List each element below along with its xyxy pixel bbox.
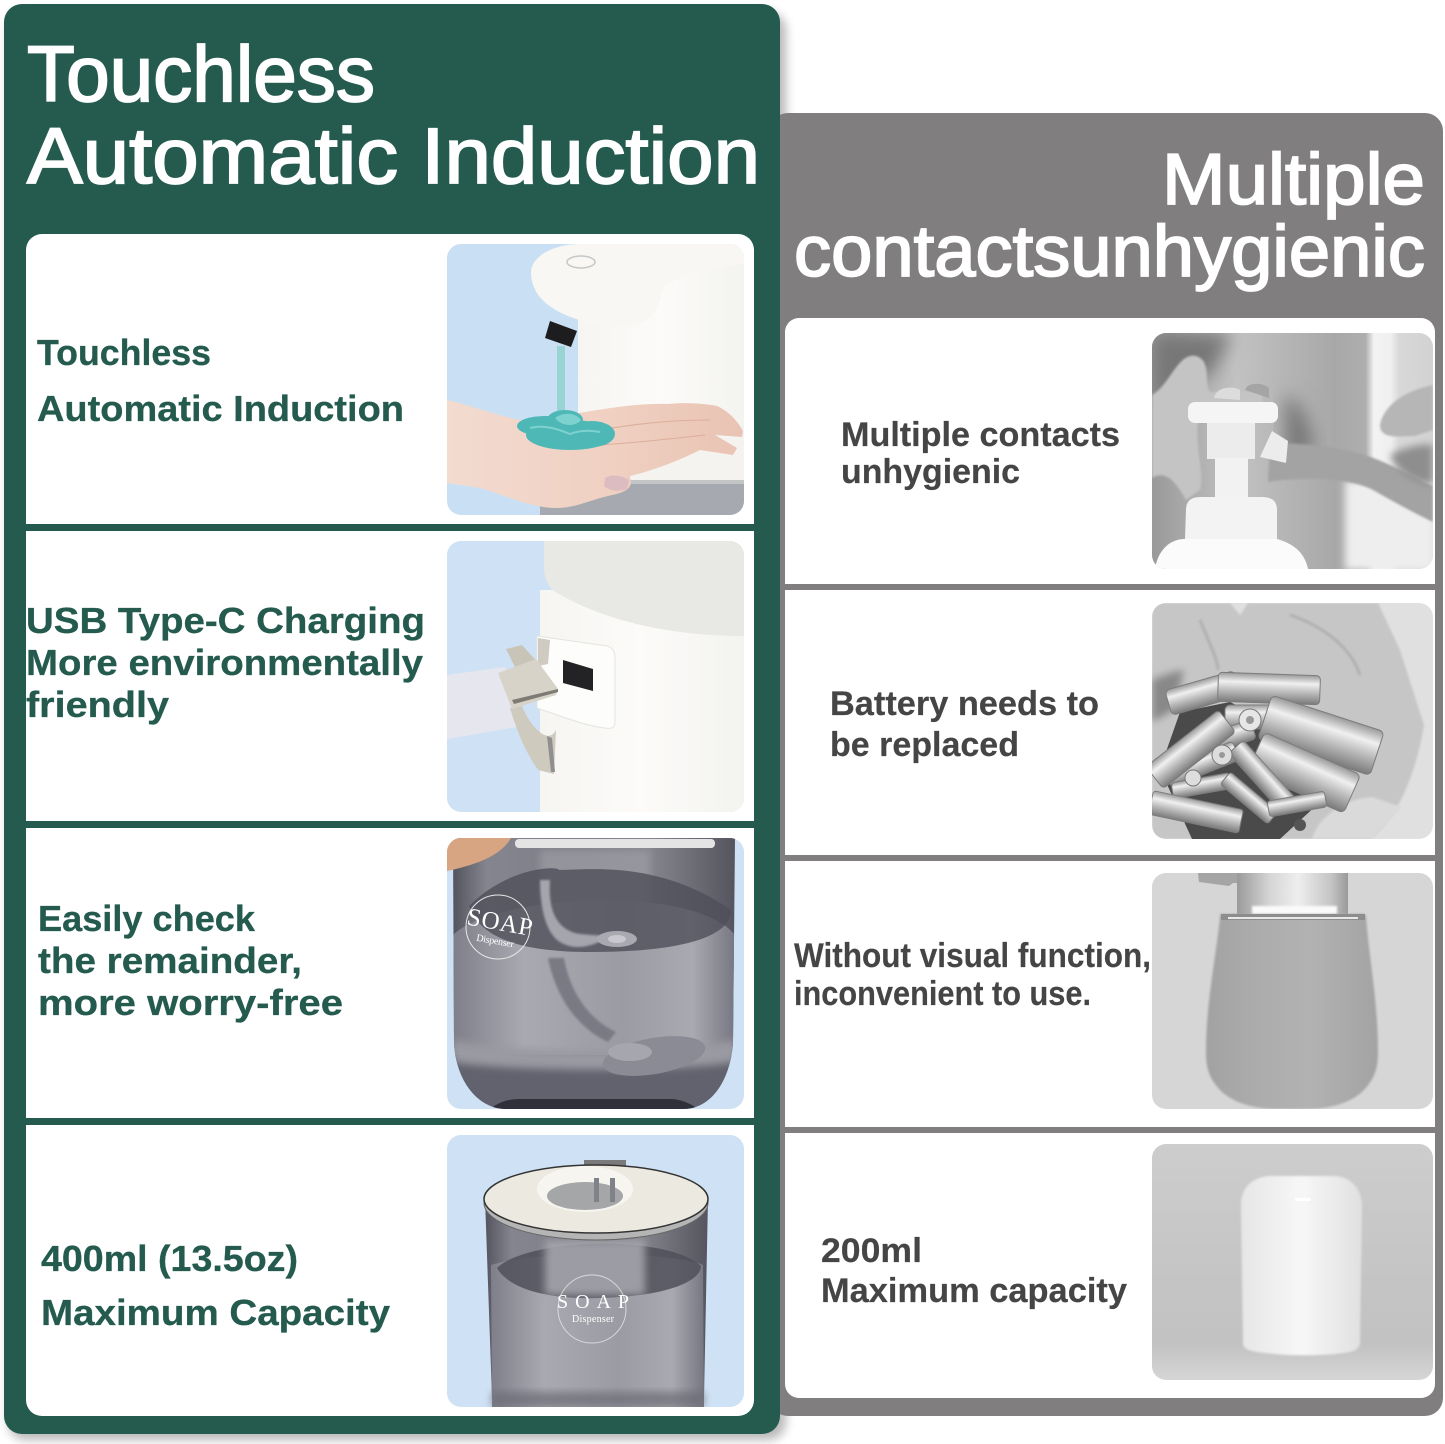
- photo: opaque grey soap bottle: [1152, 873, 1433, 1109]
- row: touchless: [37, 244, 744, 515]
- heading: Multiple contacts unhygienic: [794, 140, 1425, 292]
- text: 400ml (13.5oz) Maximum Capacity: Maximum Capacity: [41, 1292, 390, 1333]
- row: no visual function: [794, 873, 1433, 1109]
- row divider 3: [785, 1127, 1435, 1133]
- logo: SOAP Dispenser: Dispenser: [572, 1314, 615, 1325]
- panel shadow: [8, 12, 786, 1440]
- white content card: comparison: [785, 318, 1435, 1398]
- heading: Touchless Automatic Induction: Automatic Induction: [27, 111, 760, 200]
- text: Multiple contacts unhygienic: [841, 416, 1120, 491]
- heading: Touchless Automatic Induction: [27, 29, 760, 200]
- text: Battery needs to be replaced: be replaced: [830, 726, 1019, 764]
- text: Battery needs to be replaced: [830, 685, 1099, 764]
- logo: SOAP Dispenser: SOAP: [557, 1291, 629, 1313]
- photo: small white refill bottle: [1152, 1144, 1433, 1380]
- text: USB Type-C Charging More environmentally friendly: USB Type-C Charging: [26, 600, 425, 641]
- text: Touchless Automatic Induction: Touchless: [37, 332, 211, 373]
- text: 200ml Maximum capacity: Maximum capacity: [821, 1272, 1127, 1310]
- heading: Multiple contacts unhygienic: contactsunhygienic: [794, 212, 1425, 292]
- text: Easily check the remainder, more worry-free: [38, 898, 343, 1023]
- panel: comparison product (grey): [770, 113, 1443, 1416]
- batteries: [1146, 671, 1384, 833]
- logo: SOAP Dispenser: [557, 1275, 629, 1343]
- logo: SOAP Dispenser: Dispenser: [475, 933, 515, 950]
- photo: soap dispensed onto hand: [447, 244, 744, 515]
- text: USB Type-C Charging More environmentally friendly: More environmentally: [26, 642, 423, 683]
- row: multiple contacts: [841, 333, 1435, 570]
- logo: SOAP Dispenser: SOAP: [465, 904, 535, 942]
- text: Battery needs to be replaced: Battery needs to: [830, 685, 1099, 723]
- row: capacity: [41, 1135, 744, 1407]
- text: Easily check the remainder, more worry-free: the remainder,: [38, 940, 302, 981]
- text: Touchless Automatic Induction: [37, 332, 404, 429]
- text: USB Type-C Charging More environmentally friendly: friendly: [26, 684, 169, 725]
- text: Without visual function, inconvenient to use.: inconvenient to use.: [794, 975, 1091, 1013]
- text: Easily check the remainder, more worry-free: more worry-free: [38, 982, 343, 1023]
- hands: [1152, 603, 1424, 839]
- photo: 400ml tank from above: [447, 1135, 744, 1407]
- row: 200ml capacity: [821, 1144, 1433, 1380]
- text: Multiple contacts unhygienic: unhygienic: [841, 453, 1020, 491]
- text: 200ml Maximum capacity: 200ml: [821, 1232, 922, 1270]
- text: 400ml (13.5oz) Maximum Capacity: 400ml (13.5oz): [41, 1238, 298, 1279]
- text: USB Type-C Charging More environmentally friendly: [26, 600, 425, 725]
- photo: finger touching foam pump: [1152, 333, 1435, 570]
- row divider 1: [26, 524, 754, 531]
- text: 400ml (13.5oz) Maximum Capacity: [41, 1238, 390, 1333]
- row: battery: [830, 603, 1433, 839]
- row: easily check: [38, 838, 744, 1109]
- heading: Multiple contacts unhygienic: Multiple: [1162, 140, 1425, 220]
- text: 200ml Maximum capacity: [821, 1232, 1127, 1310]
- text: Without visual function, inconvenient to use.: [794, 937, 1151, 1013]
- text: Multiple contacts unhygienic: Multiple contacts: [841, 416, 1120, 454]
- text: Touchless Automatic Induction: Automatic Induction: [37, 388, 404, 429]
- row: USB Type-C: [26, 541, 744, 812]
- white content card: features: [26, 234, 754, 1416]
- text: Easily check the remainder, more worry-free: Easily check: [38, 898, 256, 939]
- row divider 1: [785, 584, 1435, 590]
- logo: SOAP Dispenser: [465, 895, 535, 959]
- photo: USB-C charging port: [447, 541, 744, 812]
- heading: Touchless Automatic Induction: Touchless: [27, 29, 375, 118]
- photo: handful of used batteries: [1146, 603, 1433, 839]
- photo: transparent tank liquid level: [447, 838, 744, 1109]
- row divider 3: [26, 1118, 754, 1125]
- row divider 2: [26, 821, 754, 828]
- text: Without visual function, inconvenient to use.: Without visual function,: [794, 937, 1151, 975]
- panel: automatic product (green): [4, 4, 780, 1434]
- row divider 2: [785, 855, 1435, 861]
